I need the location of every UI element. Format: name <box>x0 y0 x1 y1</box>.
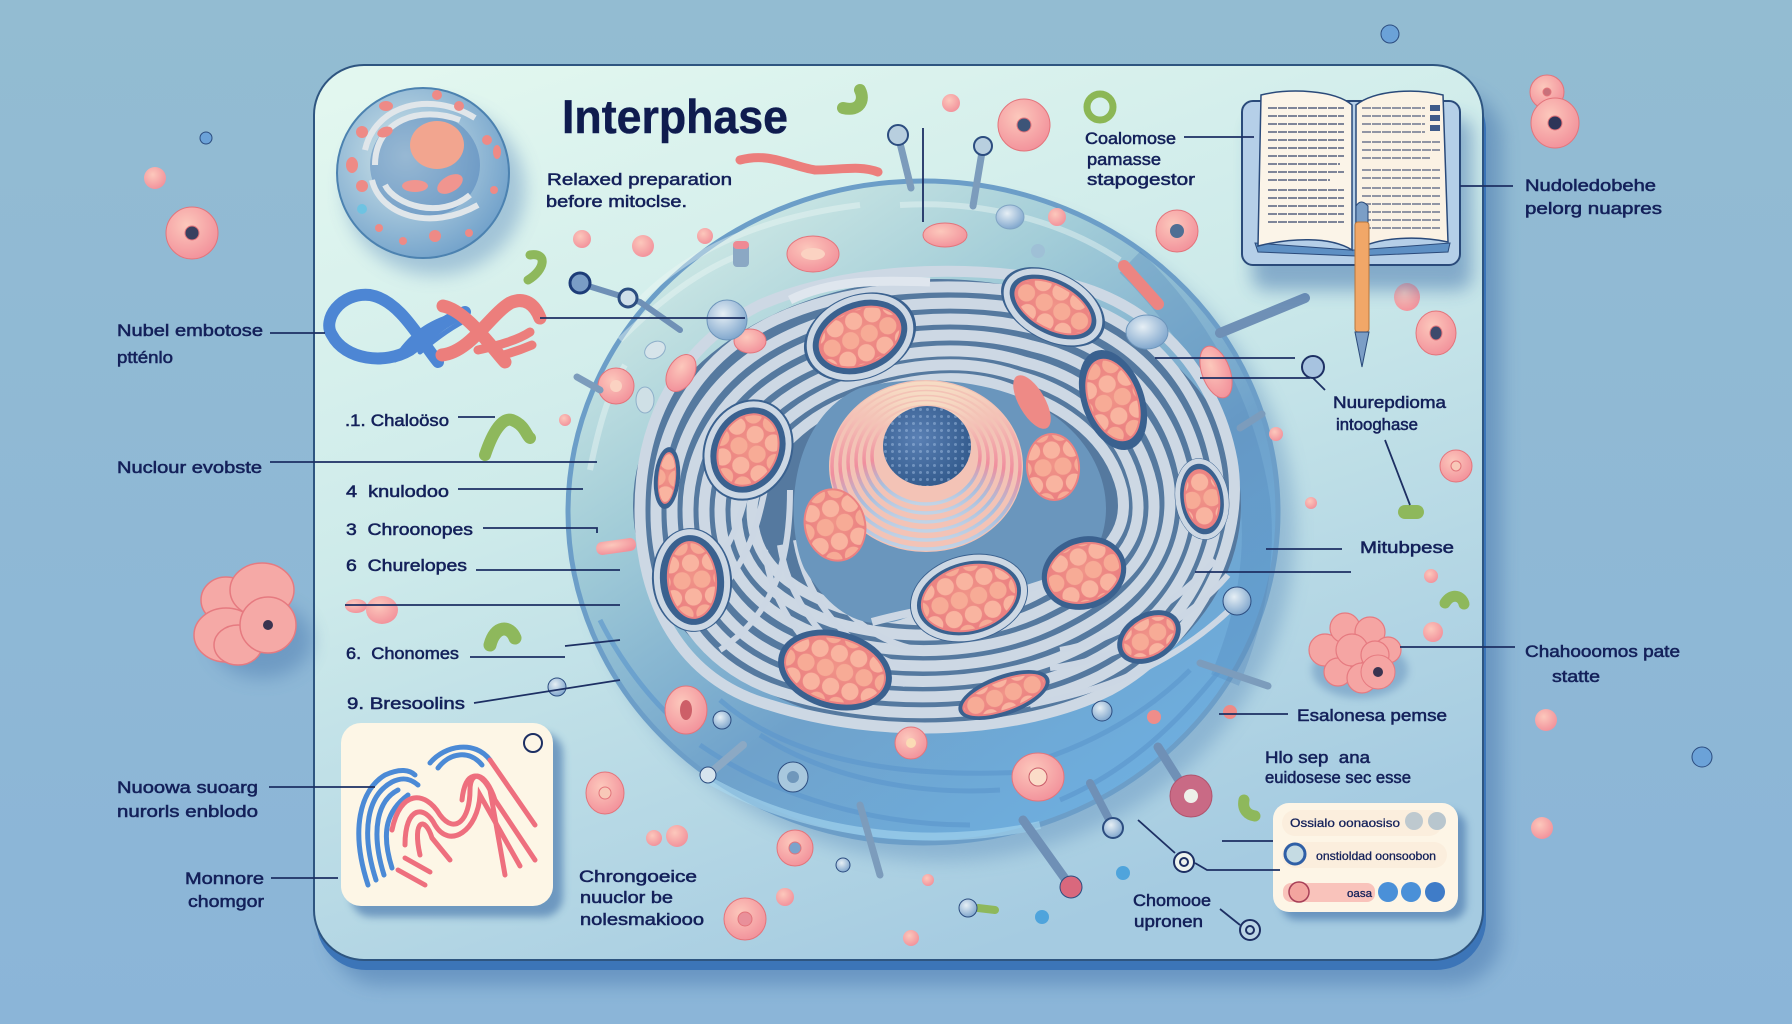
organelle 9 <box>1031 524 1137 622</box>
legend row 1 <box>1282 810 1446 836</box>
icon: open book with pen <box>1242 91 1472 367</box>
left outer labels: ptténlo <box>117 348 173 367</box>
organelle 11 <box>952 660 1056 730</box>
organelle 2 <box>988 251 1118 363</box>
right outer labels: Chahooomos pate <box>1525 642 1680 661</box>
icon: red worm <box>740 158 878 172</box>
inner right labels: upronen <box>1134 912 1203 931</box>
organelle 6 <box>795 481 875 569</box>
icon: pink cells with centres <box>166 75 1579 940</box>
filament band: membranes <box>633 271 1241 731</box>
organelle 3 <box>1066 341 1160 459</box>
legend row 3: oasa <box>1347 888 1373 900</box>
icon: raspberry cell right <box>1309 613 1408 698</box>
cell diagram <box>568 125 1305 898</box>
inner right labels: Hlo sep ana <box>1265 748 1371 767</box>
numbered labels: 6 Churelopes <box>346 556 467 575</box>
organelle 8 <box>900 541 1038 655</box>
numbered labels: 6. Chonomes <box>346 644 459 663</box>
icon: DNA helix <box>329 295 540 362</box>
leader lines <box>269 128 1515 925</box>
inner right labels: stapogestor <box>1087 170 1195 189</box>
pen <box>1355 202 1369 367</box>
inner right labels: nolesmakiooo <box>580 910 704 929</box>
inner right labels: Chrongoeice <box>579 867 697 886</box>
legend row 2 <box>1282 842 1447 868</box>
left outer labels: Monnore <box>185 869 264 888</box>
legend card <box>1273 803 1466 920</box>
inner right labels: euidosese sec esse <box>1265 768 1411 787</box>
left outer labels: Nuclour evobste <box>117 458 262 477</box>
inner right labels: pamasse <box>1087 150 1161 169</box>
numbered labels: 3 Chroonopes <box>346 520 473 539</box>
organelle 13 <box>651 446 683 510</box>
inner right labels <box>579 129 1454 931</box>
inset: whole cell thumbnail <box>337 88 525 275</box>
inset: chromatin fingerprint card <box>341 723 563 917</box>
icon: pointer rings <box>1174 356 1324 940</box>
organelle 14 <box>1170 455 1234 543</box>
left outer labels: Nuoowa suoarg <box>117 778 258 797</box>
free-floating organelles <box>144 25 1712 946</box>
organelle 10 <box>769 617 901 723</box>
title: Interphase <box>562 90 788 143</box>
icon: blue balls <box>200 25 1712 924</box>
numbered labels: .1. Chaloöso <box>345 411 449 430</box>
numbered labels: 4 knulodoo <box>346 482 449 501</box>
icon: small ring <box>524 734 542 752</box>
inner right labels: Esalonesa pemse <box>1297 706 1447 725</box>
subtitle: before mitoclse. <box>546 192 687 211</box>
left outer labels: nurorls enblodo <box>117 802 258 821</box>
nucleus <box>794 380 1106 623</box>
icon: raspberry cell left <box>194 563 312 678</box>
icon: green hooks <box>485 90 1464 910</box>
numbered labels: 9. Bresoolins <box>347 694 465 713</box>
organelle 12 <box>1108 599 1190 675</box>
icon: green ring <box>1087 94 1113 120</box>
organelle 7 <box>648 525 736 635</box>
left outer labels: chomgor <box>188 892 264 911</box>
organelle 5 <box>1023 431 1083 503</box>
cell body <box>568 181 1295 861</box>
icon: pink dots <box>144 94 1557 946</box>
left outer labels <box>117 321 264 911</box>
inner right labels: Chomooe <box>1133 891 1211 910</box>
left outer labels: Nubel embotose <box>117 321 263 340</box>
inner right labels: nuuclor be <box>580 888 673 907</box>
right outer labels: Nudoledobehe <box>1525 176 1656 195</box>
subtitle <box>546 170 732 211</box>
membrane pins <box>577 125 1305 898</box>
subtitle: Relaxed preparation <box>547 170 732 189</box>
inner right labels: Mitubpese <box>1360 538 1454 557</box>
chromatin strands <box>359 747 535 885</box>
organelle 4 <box>686 384 810 516</box>
mitochondria <box>648 251 1234 730</box>
right outer labels: pelorg nuapres <box>1525 199 1662 218</box>
numbered labels <box>345 411 473 713</box>
inner right labels: Coalomose <box>1085 129 1176 148</box>
right outer labels: statte <box>1552 667 1600 686</box>
panel: main card <box>314 65 1502 985</box>
pin <box>570 273 680 330</box>
inner right labels: Nuurepdioma <box>1333 393 1447 412</box>
legend row 1: Ossialo oonaosiso <box>1290 816 1400 830</box>
legend row 2: onstioldad oonsoobon <box>1316 849 1436 863</box>
cytoplasm bodies <box>598 205 1283 801</box>
nucleus rings <box>829 380 1023 552</box>
inner right labels: intooghase <box>1336 415 1418 434</box>
organelle 1 <box>790 276 930 398</box>
nucleolus <box>883 406 971 486</box>
icon: red blob on line <box>345 537 637 624</box>
legend row 3 <box>1283 882 1445 902</box>
right outer labels <box>1525 176 1680 686</box>
organelle 15 <box>1006 370 1058 434</box>
